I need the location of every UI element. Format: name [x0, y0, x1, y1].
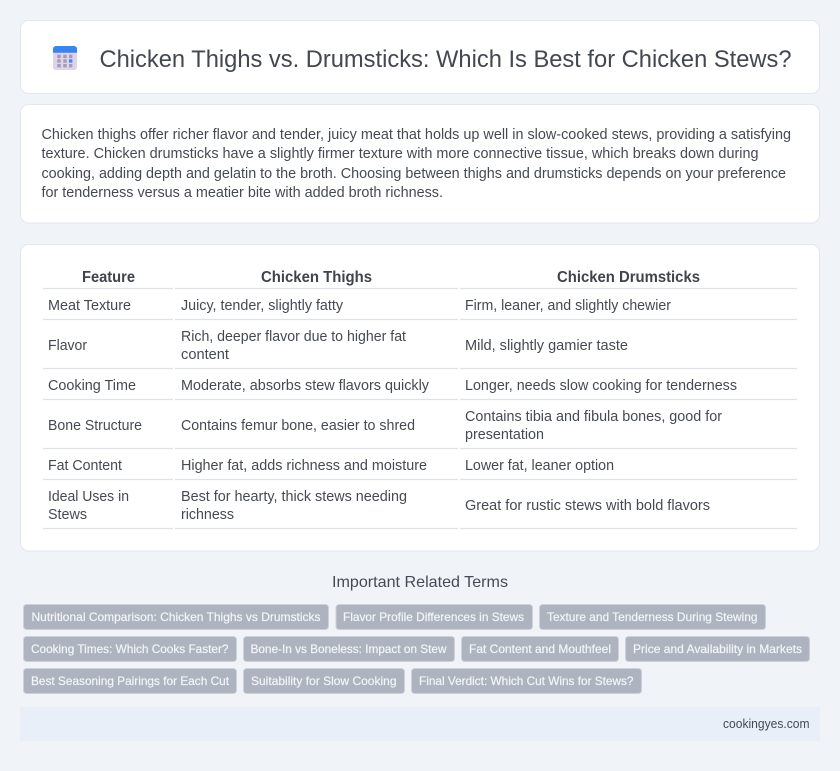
title: Chicken Thighs vs. Drumsticks: Which Is Best for Chicken Stews? — [100, 46, 792, 73]
text block: intro paragraph — [42, 127, 791, 201]
row: cooking time: Longer, needs slow cooking for tenderness — [465, 378, 737, 394]
tag: price and availability — [626, 636, 810, 662]
tag: fat content and mouthfeel: Fat Content and Mouthfeel — [469, 642, 611, 656]
heading: important related terms: Important Related Terms — [332, 574, 508, 591]
footer — [20, 707, 820, 741]
tag: cooking times — [24, 636, 236, 662]
row: flavor: Rich, deeper flavor due to higher fat — [181, 329, 406, 345]
row: bone structure: Contains tibia and fibula bones, good for — [465, 409, 722, 425]
row: ideal uses in stews: Best for hearty, thick stews needing — [181, 489, 407, 505]
tag: price and availability: Price and Availability in Markets — [633, 642, 802, 656]
row: ideal uses in stews — [48, 489, 710, 523]
row: bone structure: presentation — [465, 427, 544, 443]
row: meat texture: Firm, leaner, and slightly chewier — [465, 298, 671, 314]
tag: suitability for slow cooking: Suitability for Slow Cooking — [251, 674, 396, 688]
tag: cooking times: Cooking Times: Which Cooks Faster? — [31, 642, 229, 656]
row: ideal uses in stews: Stews — [48, 507, 87, 523]
panel: intro text — [20, 104, 820, 223]
text block: intro paragraph: Chicken thighs offer richer flavor and tender, juicy meat that holds up well in slow-cooked stews, providing a satisfying — [42, 127, 791, 143]
row: cooking time: Moderate, absorbs stew flavors quickly — [181, 378, 430, 394]
row: flavor: Flavor — [48, 338, 87, 354]
tag: flavor profile: Flavor Profile Differences in Stews — [343, 610, 524, 624]
row: flavor: content — [181, 347, 229, 363]
row: ideal uses in stews: Great for rustic stews with bold flavors — [465, 498, 710, 514]
tag: texture and tenderness: Texture and Tenderness During Stewing — [547, 610, 758, 624]
row: meat texture: Juicy, tender, slightly fatty — [181, 298, 344, 314]
tag: final verdict: Final Verdict: Which Cut Wins for Stews? — [419, 674, 634, 688]
row: fat content: Lower fat, leaner option — [465, 458, 614, 474]
row: fat content — [48, 458, 614, 474]
tag: texture and tenderness — [540, 604, 766, 630]
row: bone structure — [48, 409, 722, 443]
panel: header — [20, 20, 820, 94]
row: meat texture: Meat Texture — [48, 298, 131, 314]
row: fat content: Fat Content — [48, 458, 122, 474]
table header row: Chicken Drumsticks — [557, 269, 700, 286]
tag: nutritional comparison — [24, 604, 328, 630]
row: meat texture — [48, 298, 671, 314]
row: bone structure: Contains femur bone, easier to shred — [181, 418, 415, 434]
tag: best seasoning pairings: Best Seasoning Pairings for Each Cut — [31, 674, 230, 688]
tag: best seasoning pairings — [24, 668, 236, 694]
related terms tags — [24, 604, 810, 694]
text block: intro paragraph: texture. Chicken drumsticks have a slightly firmer texture with more connective tissue, which breaks down during — [42, 146, 759, 162]
panel: comparison table — [20, 244, 820, 551]
tag: fat content and mouthfeel — [462, 636, 618, 662]
table header row: Feature — [82, 269, 135, 286]
row: bone structure: Bone Structure — [48, 418, 142, 434]
tag: bone-in vs boneless — [244, 636, 454, 662]
table header row: Chicken Thighs — [261, 269, 372, 286]
row: flavor — [48, 329, 628, 363]
row: cooking time: Cooking Time — [48, 378, 136, 394]
row: flavor: Mild, slightly gamier taste — [465, 338, 628, 354]
tag: flavor profile — [336, 604, 532, 630]
footer site name: cookingyes.com — [723, 717, 810, 731]
row: ideal uses in stews: Ideal Uses in — [48, 489, 129, 505]
text block: intro paragraph: for tenderness versus a meatier bite with added broth richness. — [42, 185, 443, 201]
icon: calendar — [53, 46, 77, 70]
tag: final verdict — [412, 668, 642, 694]
row: ideal uses in stews: richness — [181, 507, 234, 523]
row: cooking time — [48, 378, 737, 394]
tag: bone-in vs boneless: Bone-In vs Boneless: Impact on Stew — [250, 642, 447, 656]
tag: suitability for slow cooking — [244, 668, 404, 694]
table header row — [82, 269, 700, 286]
row: fat content: Higher fat, adds richness and moisture — [181, 458, 427, 474]
text block: intro paragraph: cooking, adding depth and gelatin to the broth. Choosing between thighs and drumsticks depends on your preference — [42, 166, 786, 182]
tag: nutritional comparison: Nutritional Comparison: Chicken Thighs vs Drumsticks — [32, 610, 320, 624]
